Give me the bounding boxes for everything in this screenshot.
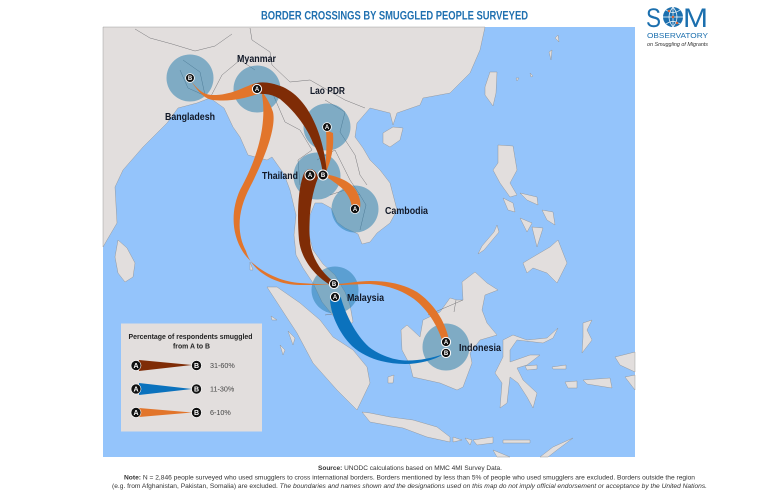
legend (121, 324, 262, 432)
logo: SOM Observatory: S (646, 3, 661, 33)
logo: SOM Observatory: OBSERVATORY (647, 31, 708, 40)
source and notes (112, 465, 707, 490)
source and notes: Source: UNODC calculations based on MMC 4MI Survey Data. (318, 465, 502, 472)
country labels: Myanmar (237, 53, 276, 65)
legend row: 11-30%: 11-30% (210, 384, 235, 394)
legend: Percentage of respondents smuggled (128, 332, 253, 341)
marker letters: B (321, 173, 326, 179)
logo: SOM Observatory: M (683, 3, 708, 33)
country labels: Lao PDR (310, 85, 345, 97)
flow: Indonesia to Malaysia, 6-10% (338, 281, 449, 340)
legend row: 6-10% (131, 408, 231, 418)
title: BORDER CROSSINGS BY SMUGGLED PEOPLE SURVEYED (261, 8, 528, 22)
flow: Thailand to Malaysia, 31-60% (298, 169, 335, 286)
country labels: Bangladesh (165, 111, 215, 123)
marker letters: A (333, 295, 338, 301)
place markers (186, 74, 451, 358)
flow: Myanmar to Thailand, 31-60% (252, 82, 327, 174)
legend: from A to B (173, 342, 210, 350)
legend row: 31-60%: A (133, 363, 139, 370)
country labels: Malaysia (347, 292, 384, 304)
marker letters: B (188, 76, 193, 82)
source and notes: Note: N = 2,846 people surveyed who used smugglers to cross international borders. Borders mentioned by less than 5% of people who used smugglers are excluded. Borders outside the region (124, 474, 695, 482)
marker letters: B (332, 282, 337, 288)
country borders (135, 28, 463, 315)
logo: SOM Observatory: on Smuggling of Migrants (647, 42, 708, 48)
legend row: 11-30%: A (133, 386, 139, 394)
legend row: 6-10%: B (194, 410, 199, 417)
marker letters: A (325, 125, 330, 131)
marker letters: A (444, 340, 449, 346)
country labels: Thailand (262, 170, 298, 182)
country labels: Cambodia (385, 205, 428, 217)
legend row: 6-10%: 6-10% (210, 408, 231, 417)
legend row: 11-30% (131, 383, 235, 395)
country labels (165, 53, 501, 354)
flow: Lao PDR to Thailand, 6-10% (325, 130, 333, 174)
flow: Myanmar to Bangladesh, 6-10% (191, 81, 258, 101)
legend row: 6-10%: A (133, 410, 139, 417)
country circles (166, 54, 470, 370)
marker letters: A (308, 173, 313, 179)
logo: SOM Observatory (646, 3, 708, 48)
land masses (103, 27, 635, 457)
legend row: 11-30%: B (194, 386, 199, 394)
flow: Cambodia to Thailand, 6-10% (325, 174, 360, 208)
marker letters: A (353, 207, 358, 213)
legend row: 31-60%: B (194, 363, 199, 370)
marker letters: A (255, 87, 260, 93)
flow: Malaysia to Indonesia, 11-30% (330, 294, 444, 364)
marker letters (188, 76, 449, 357)
legend row: 31-60% (131, 360, 235, 371)
marker letters: B (444, 351, 449, 357)
legend row: 31-60%: 31-60% (210, 361, 235, 370)
map panel (103, 27, 635, 457)
source and notes: (e.g. from Afghanistan, Pakistan, Somalia) are excluded. The boundaries and names shown and the designations used on this map do not imply official endorsement or acceptance by the United Nations. (112, 483, 707, 490)
country labels: Indonesia (459, 342, 501, 354)
flow: Myanmar to Malaysia, 6-10% (234, 93, 332, 285)
